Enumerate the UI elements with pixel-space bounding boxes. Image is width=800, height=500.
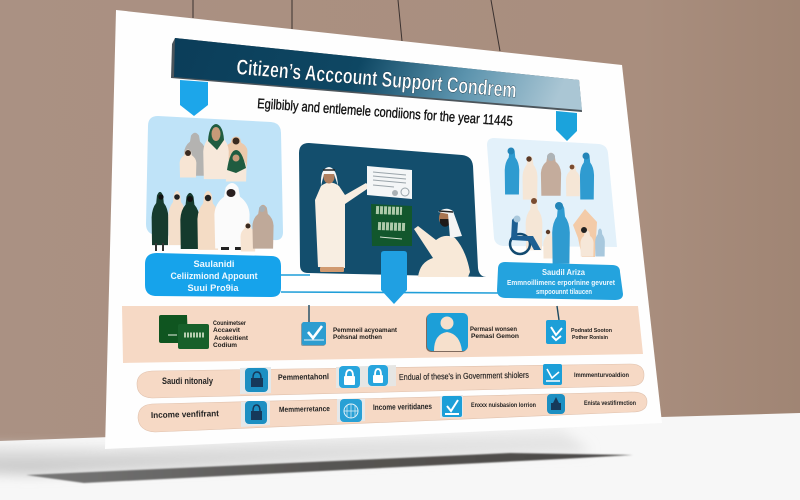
floor	[0, 413, 800, 500]
floor shading under poster	[0, 428, 590, 474]
text: personal 2	[470, 327, 519, 340]
icon: flag cards	[159, 315, 209, 349]
text: Memmerretance	[279, 404, 330, 414]
text: government: Endual of these's in Government shiolers	[399, 370, 529, 382]
standing man	[315, 167, 370, 272]
subtitle: Egilbibly and entlemele condiions for the year 11445	[257, 95, 513, 129]
text: personal 3: Podnatd Sooton	[571, 328, 612, 334]
seated man	[414, 209, 470, 277]
title: Citizen’s Acccount Support Condrem	[236, 55, 518, 102]
icon: lock 2	[368, 365, 388, 386]
floor shadow	[26, 453, 633, 483]
centre arrow	[381, 251, 407, 304]
wheelchair	[510, 216, 541, 254]
icon: lock 1	[339, 366, 360, 388]
text: account: Codium	[213, 343, 237, 349]
text: account: Accaevit	[213, 328, 240, 334]
icon: check	[301, 322, 326, 346]
icon: chevron check	[546, 320, 566, 344]
label text	[507, 267, 616, 296]
text: Enxxx nuisbasion lorrion	[471, 403, 536, 409]
label: left	[145, 253, 281, 297]
ribbon arrow left	[180, 80, 208, 116]
figures: bottom family	[152, 183, 274, 251]
label text: Saulanidi	[194, 259, 234, 270]
bottom row people	[526, 198, 605, 264]
flag	[371, 204, 412, 246]
certificate	[367, 166, 412, 199]
text: income: Income venfifrant	[151, 408, 219, 420]
text: personal: Pohsnal mothen	[333, 335, 382, 341]
hanging wires	[193, 0, 500, 51]
panel: peach conditions band	[122, 305, 643, 363]
icon: person	[426, 313, 468, 352]
label: right	[497, 262, 623, 300]
text: personal 2: Pemasl Gemon	[471, 334, 519, 340]
icon: dark box	[245, 401, 267, 424]
text: personal 3	[571, 328, 612, 341]
text: account	[213, 321, 248, 349]
label text: smpoounnt tilaucen	[536, 289, 592, 296]
text: Enista vestifirmction	[584, 401, 636, 407]
text: nationality: Saudi nitonaly	[162, 376, 213, 386]
label text: Emmnoillimenc erporlnine gevuret	[507, 280, 616, 287]
text: personal 3: Pother Ronisin	[572, 335, 608, 341]
label text	[170, 259, 258, 294]
top row people	[505, 148, 594, 200]
panel: right group	[487, 138, 617, 264]
icon: dark lock	[245, 368, 268, 392]
label text: Saudil Ariza	[542, 267, 585, 277]
label text: Celiizmiond Appount	[170, 271, 258, 282]
text: account: Acokcitient	[214, 336, 248, 342]
icon: dark stack	[547, 394, 565, 414]
text: Income veritidanes	[373, 402, 432, 412]
poster board	[105, 10, 662, 449]
text: personal	[333, 328, 397, 341]
title banner	[171, 38, 582, 112]
ribbon arrow right	[556, 111, 577, 141]
row 1 pill	[137, 364, 644, 398]
label text: Suui Pro9ia	[188, 283, 239, 294]
row 2 pill	[138, 392, 647, 432]
icon: check 2	[543, 364, 562, 385]
connector band	[281, 275, 499, 293]
text: Immmenturvoaldion	[574, 373, 629, 379]
text: account: Counimetser	[213, 321, 247, 327]
panel: centre scene	[299, 143, 487, 277]
icon: check 3	[442, 396, 462, 417]
figures: top family	[180, 124, 247, 181]
panel: left families	[146, 116, 283, 251]
text: personal: Pemmneil acyoamant	[333, 328, 397, 334]
icon: globe	[340, 399, 362, 422]
text: personal 2: Permasl wonsen	[470, 327, 517, 333]
text: Pemmentahonl	[278, 372, 329, 382]
